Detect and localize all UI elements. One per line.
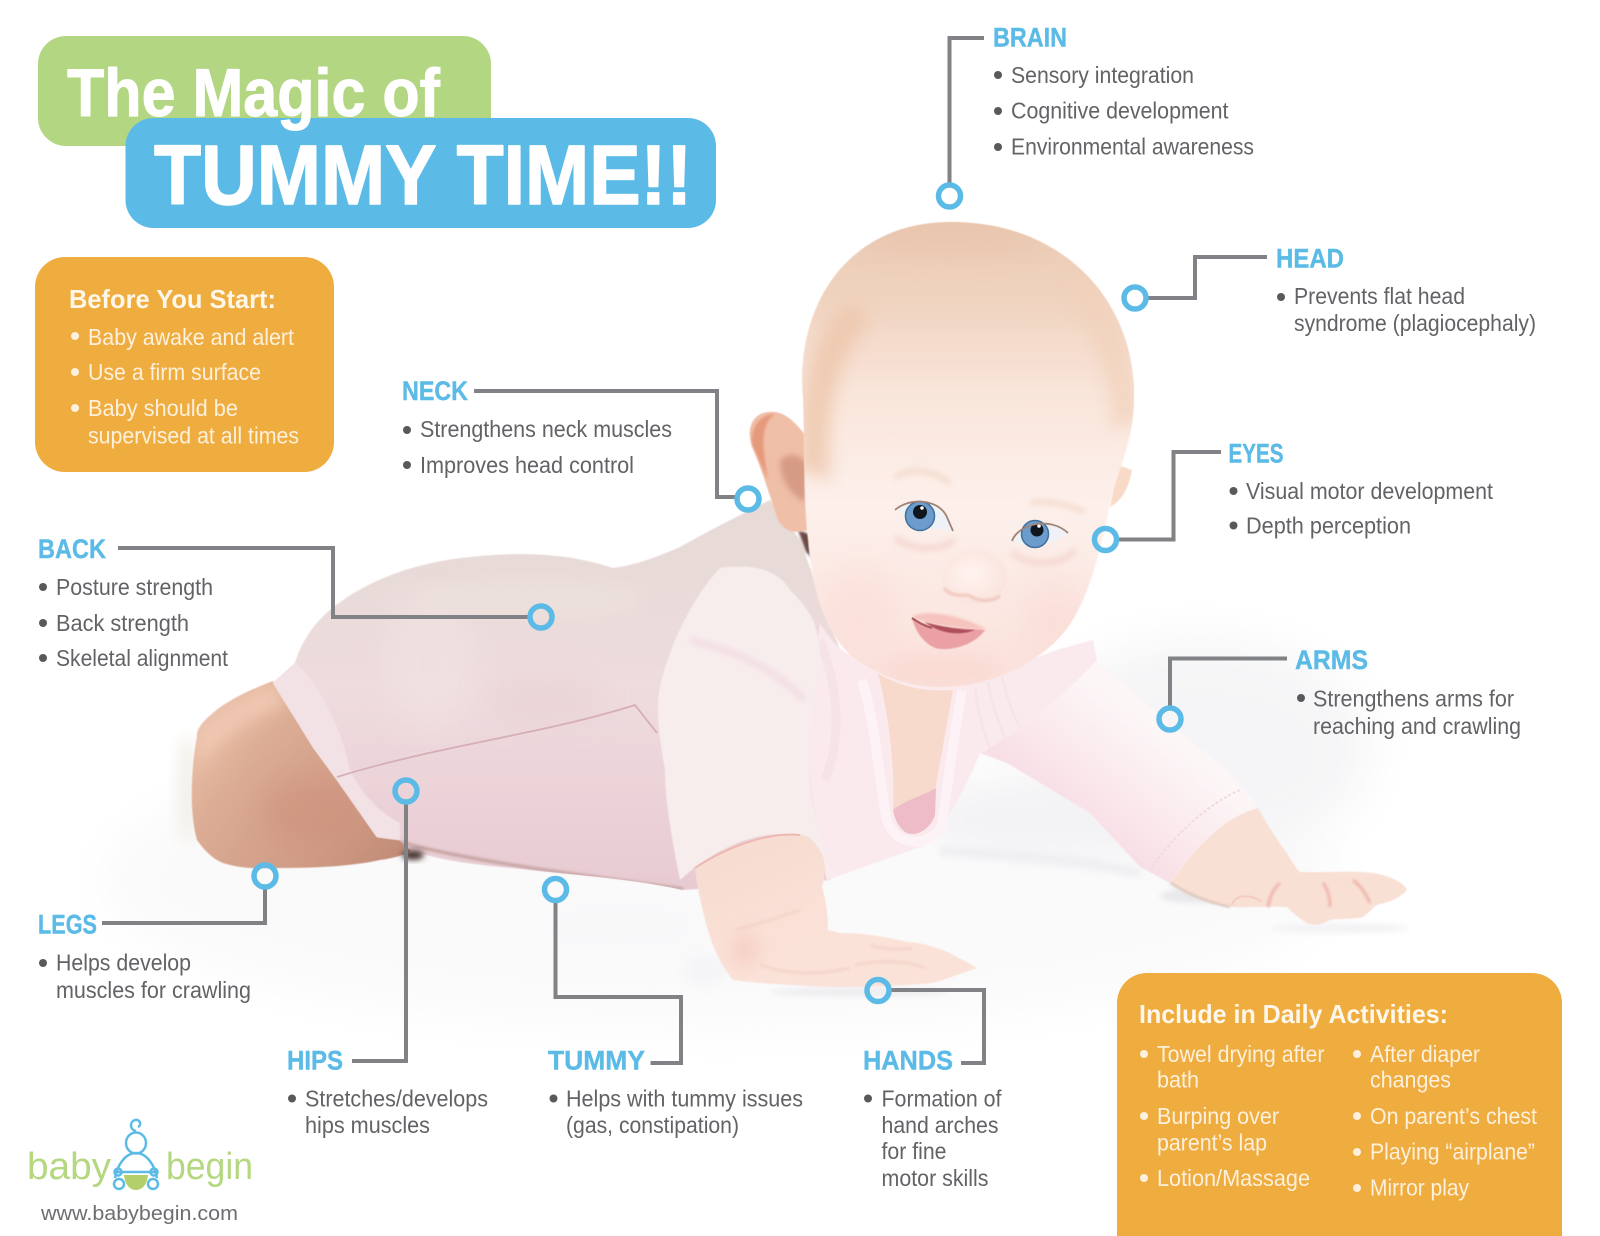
bed sheet shading (100, 640, 1410, 1030)
callout: hips: Stretches/develops (305, 1086, 488, 1112)
neck skin (878, 673, 953, 812)
back of neck shadow (798, 530, 820, 565)
sleeve fold (690, 640, 805, 700)
callout: hands: Formation of (882, 1086, 1002, 1112)
callout: arms (1159, 645, 1521, 739)
callout: brain: Environmental awareness (1011, 134, 1254, 160)
callout: head: syndrome (plagiocephaly) (1294, 310, 1536, 336)
callout: eyes: EYES (1228, 438, 1284, 468)
title panel: green (38, 36, 491, 146)
callout: eyes: Visual motor development (1246, 478, 1494, 504)
head shading (799, 208, 1140, 684)
panel: include in daily activities: Lotion/Massage (1157, 1165, 1310, 1191)
callout: back: Back strength (56, 610, 189, 636)
panel: include in daily activities: parent’s lap (1157, 1130, 1267, 1156)
callout: hips (287, 780, 488, 1138)
callout: tummy: (gas, constipation) (566, 1112, 739, 1138)
baby photo (100, 208, 1410, 1030)
title: Tummy Time: TUMMY TIME!! (154, 128, 692, 222)
callout: head: Prevents flat head (1294, 283, 1465, 309)
panel: include in daily activities (1117, 973, 1562, 1236)
callout: neck: Strengthens neck muscles (420, 416, 672, 442)
panel: before you start: supervised at all times (88, 422, 299, 448)
panel: include in daily activities: On parent’s chest (1370, 1103, 1538, 1129)
title: The Magic of: The Magic of (67, 55, 440, 131)
panel: include in daily activities: Burping over (1157, 1103, 1279, 1129)
belly and chest (807, 623, 1097, 880)
head (802, 222, 1134, 688)
right forearm and hand (1170, 808, 1407, 925)
panel: include in daily activities: Playing “airplane” (1370, 1138, 1535, 1164)
panel: before you start (35, 257, 334, 472)
callout: back (38, 534, 552, 671)
callout: legs: Helps develop (56, 950, 191, 976)
callout: neck: NECK (402, 376, 468, 406)
panel: before you start: Before You Start: (69, 284, 276, 314)
right ear (1110, 465, 1132, 507)
callout: brain (938, 22, 1254, 207)
panel: include in daily activities: Towel drying after (1157, 1041, 1325, 1067)
callout: head: HEAD (1276, 244, 1344, 274)
panel: include in daily activities: Include in Daily Activities: (1139, 999, 1448, 1029)
callout: back: Skeletal alignment (56, 645, 229, 671)
callout: hips: HIPS (287, 1046, 343, 1076)
logo: baby begin: baby (27, 1146, 111, 1188)
legs (192, 681, 412, 868)
callout: eyes (1094, 438, 1494, 550)
callout: hands: motor skills (882, 1165, 988, 1191)
callout: arms: Strengthens arms for (1313, 686, 1514, 712)
callout: hips: hips muscles (305, 1112, 430, 1138)
eyebrows (895, 471, 1085, 512)
panel: include in daily activities: bath (1157, 1066, 1199, 1092)
neck bands (862, 680, 962, 842)
left eye (895, 502, 953, 531)
callout: tummy (544, 878, 803, 1138)
right arm sleeve (980, 640, 1258, 883)
left collar fold (820, 640, 836, 780)
leg band (273, 663, 400, 840)
callout: back: Posture strength (56, 574, 213, 600)
callout: legs: muscles for crawling (56, 977, 251, 1003)
sleeve hem (1150, 790, 1240, 870)
callout: hands (863, 980, 1002, 1191)
callout: tummy: TUMMY (548, 1046, 645, 1076)
callout: legs: LEGS (38, 910, 97, 940)
under-eye shading (895, 538, 1075, 563)
logo: baby begin: begin (166, 1146, 253, 1188)
nose (943, 550, 1007, 604)
panel: include in daily activities: changes (1370, 1066, 1451, 1092)
callout: tummy: Helps with tummy issues (566, 1086, 803, 1112)
mouth (912, 613, 987, 649)
callout: neck: Improves head control (420, 452, 634, 478)
callout: head (1124, 244, 1536, 336)
right eye (1012, 520, 1068, 548)
callout: brain: Sensory integration (1011, 62, 1194, 88)
left sleeve (658, 567, 830, 883)
callout: back: BACK (38, 534, 106, 564)
panel: before you start: Baby should be (88, 395, 238, 421)
torso onesie (273, 500, 840, 890)
panel: before you start: Baby awake and alert (88, 324, 295, 350)
left forearm and hand (695, 835, 977, 987)
callout: neck (402, 376, 759, 510)
body seam (337, 705, 657, 777)
callout: arms: ARMS (1295, 645, 1368, 675)
callout: hands: HANDS (863, 1046, 953, 1076)
right collar (975, 676, 1020, 748)
callout: legs (38, 865, 276, 1003)
panel: include in daily activities: After diaper (1370, 1041, 1480, 1067)
torso folds (400, 840, 684, 890)
panel: include in daily activities: Mirror play (1370, 1174, 1469, 1200)
callout: hands: hand arches (882, 1112, 998, 1138)
callout: brain: Cognitive development (1011, 98, 1229, 124)
callout: brain: BRAIN (993, 22, 1067, 52)
panel: before you start: Use a firm surface (88, 359, 261, 385)
crotch shadow (402, 850, 424, 860)
callout: eyes: Depth perception (1246, 512, 1411, 538)
callout: hands: for fine (882, 1138, 946, 1164)
callout: arms: reaching and crawling (1313, 713, 1521, 739)
left ear (750, 412, 815, 532)
logo: baby begin (27, 1120, 253, 1225)
neckline opening (893, 788, 936, 834)
logo: baby begin: www.babybegin.com (40, 1203, 238, 1225)
